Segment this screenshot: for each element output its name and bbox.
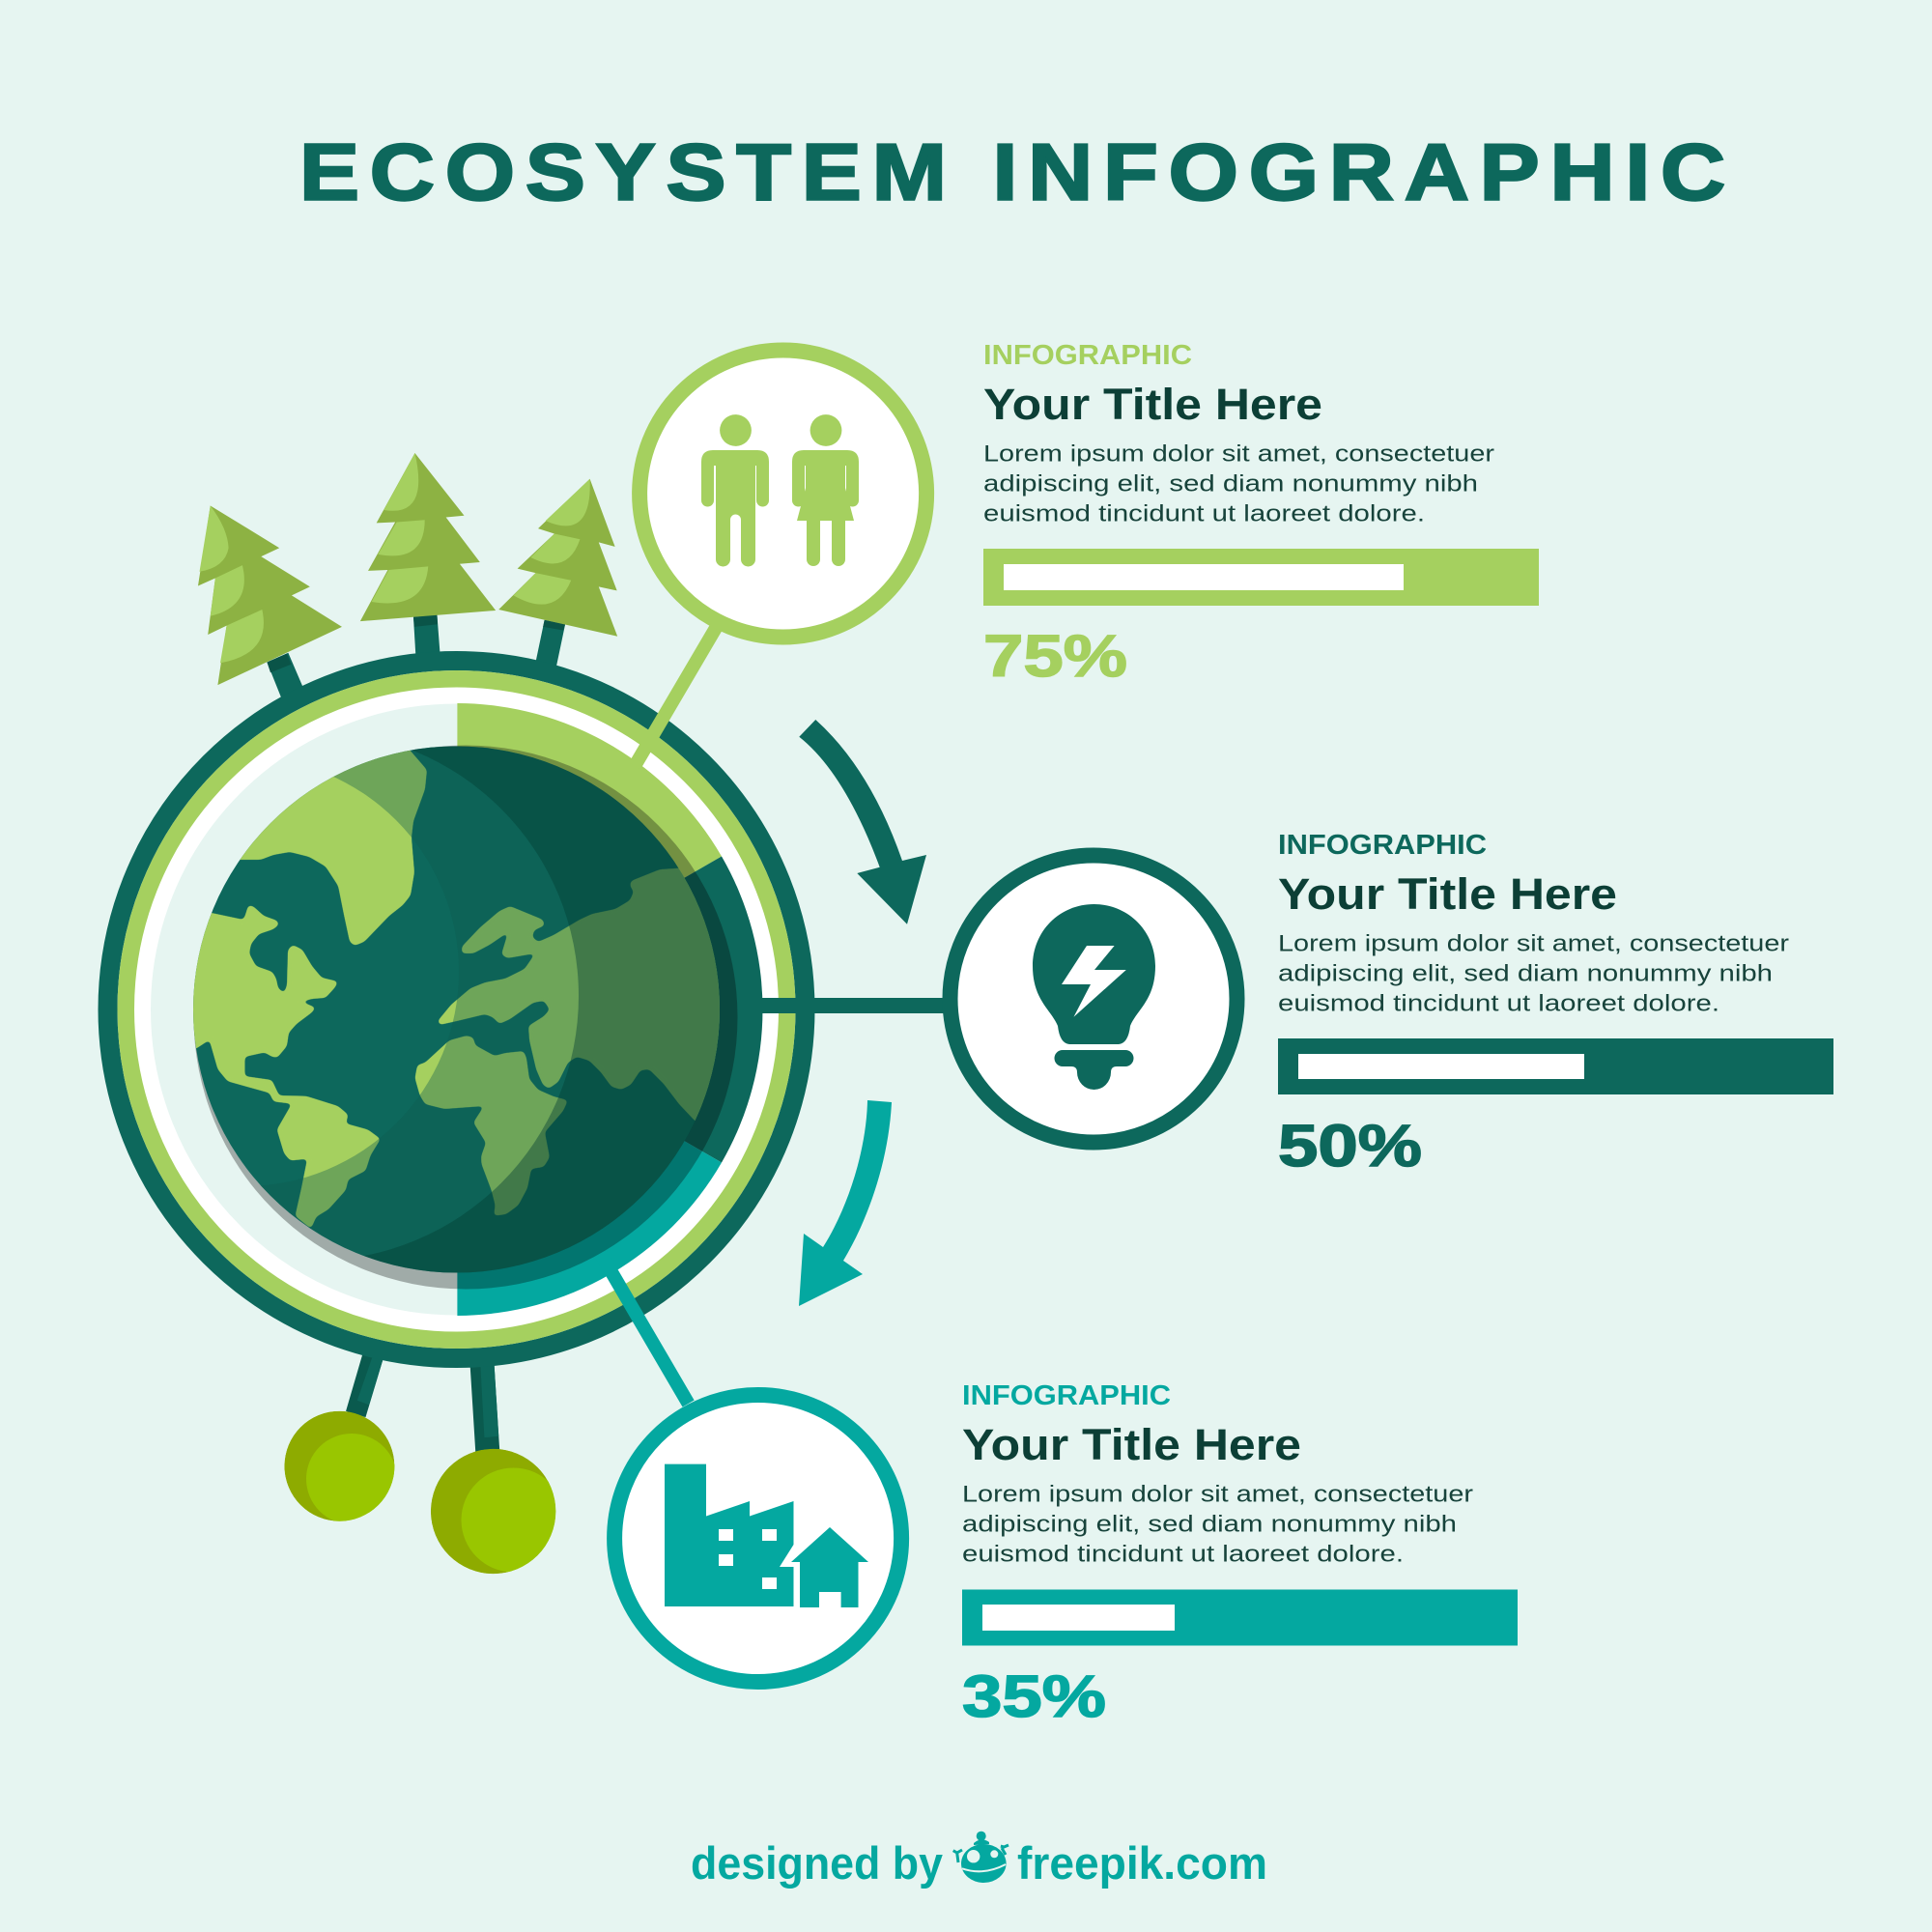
panel: 50%	[1278, 830, 1833, 1179]
tree: right	[498, 479, 617, 667]
icon: light bulb	[1033, 904, 1155, 1090]
kicker: INFOGRAPHIC	[962, 1380, 1171, 1411]
progress bar	[983, 549, 1539, 606]
footer credit: designed by	[691, 1837, 943, 1889]
progress bar	[1278, 1038, 1833, 1094]
percentage: 75%	[983, 623, 1127, 689]
kicker: INFOGRAPHIC	[1278, 830, 1487, 861]
circle: energy	[951, 856, 1236, 1142]
ring segment: green	[456, 703, 722, 1009]
body text: adipiscing elit, sed diam nonummy nibh	[962, 1511, 1457, 1538]
circle: people	[639, 350, 926, 638]
icon: freepik mascot	[953, 1832, 1009, 1883]
footer credit: freepik.com	[1017, 1837, 1267, 1889]
globe shadow	[193, 746, 738, 1289]
icon: factory	[665, 1464, 794, 1606]
connector: teal	[601, 1254, 689, 1404]
ring segment: teal	[457, 1009, 722, 1316]
body text: Lorem ipsum dolor sit amet, consectetuer	[1278, 931, 1789, 956]
body text: adipiscing elit, sed diam nonummy nibh	[983, 471, 1478, 497]
footer credit	[691, 1832, 1267, 1889]
connector: green	[635, 628, 716, 766]
body text: adipiscing elit, sed diam nonummy nibh	[1278, 960, 1773, 987]
globe light shading	[261, 746, 720, 1273]
icon: woman	[792, 414, 859, 566]
body text: Lorem ipsum dolor sit amet, consectetuer	[962, 1482, 1473, 1507]
globe dark shading	[364, 746, 720, 1273]
icon: house	[791, 1527, 868, 1607]
title: ECOSYSTEM INFOGRAPHIC	[299, 127, 1725, 216]
percentage: 50%	[1278, 1113, 1422, 1179]
heading: Your Title Here	[983, 380, 1322, 429]
continents	[174, 734, 734, 1229]
progress bar	[962, 1590, 1518, 1646]
panel: 35%	[962, 1380, 1518, 1729]
globe rings	[108, 661, 806, 1358]
body text	[1278, 931, 1789, 1016]
circle: city	[614, 1395, 901, 1682]
body text: euismod tincidunt ut laoreet dolore.	[1278, 991, 1719, 1016]
panel: 75%	[983, 340, 1539, 689]
heading: Your Title Here	[962, 1420, 1301, 1469]
kicker: INFOGRAPHIC	[983, 340, 1192, 371]
body text: euismod tincidunt ut laoreet dolore.	[962, 1542, 1404, 1567]
icon: man	[701, 414, 769, 567]
fruit: left	[284, 1411, 397, 1524]
fruit: right	[431, 1449, 566, 1574]
trees on top of the globe	[198, 453, 617, 1452]
body text	[983, 440, 1494, 527]
body text	[962, 1482, 1473, 1567]
tree: left	[198, 505, 342, 705]
percentage: 35%	[962, 1663, 1106, 1729]
branches below the globe	[346, 1352, 499, 1452]
connector: dark	[762, 998, 946, 1013]
heading: Your Title Here	[1278, 869, 1617, 919]
arrow: teal	[799, 1100, 892, 1306]
body text: Lorem ipsum dolor sit amet, consectetuer	[983, 440, 1494, 468]
tree: middle	[360, 453, 496, 667]
ring segment: dark teal	[456, 856, 762, 1163]
globe	[193, 746, 720, 1273]
arrow: dark teal	[799, 720, 926, 924]
body text: euismod tincidunt ut laoreet dolore.	[983, 500, 1425, 527]
